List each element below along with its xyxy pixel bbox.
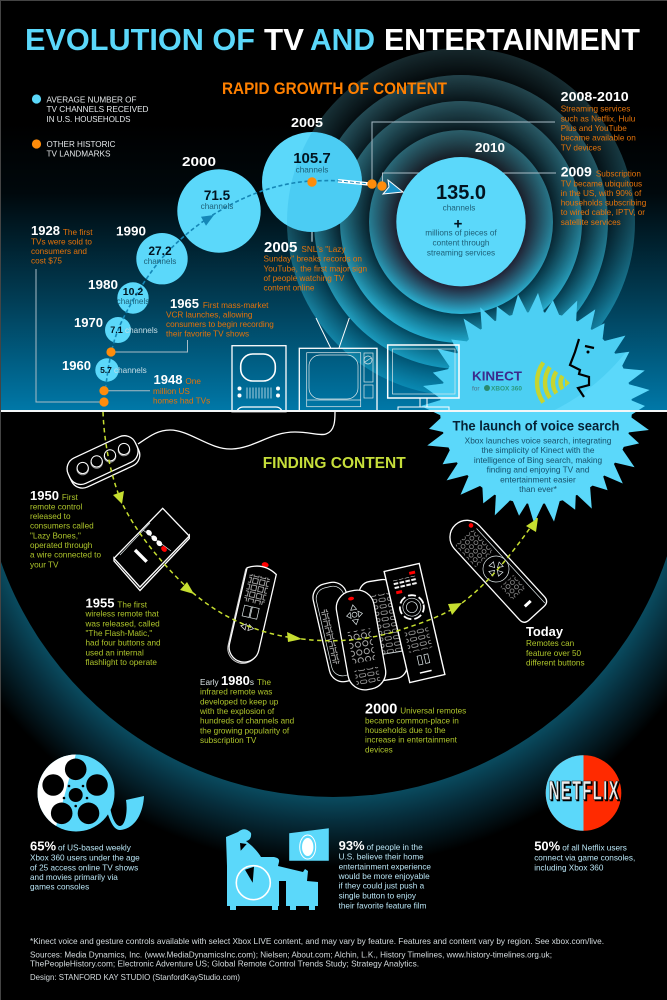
callout: today: Remotes can <box>526 639 575 648</box>
2010 circle labels: content through <box>433 239 490 248</box>
lower tv cables <box>138 412 335 449</box>
callout: 2005 SNL: Sunday" breaks records on <box>264 255 362 264</box>
stat: 93%: single button to enjoy <box>339 892 417 901</box>
callout: 2009: households subscribing <box>561 198 647 208</box>
legend: TV LANDMARKS <box>46 148 111 158</box>
channel labels: channels <box>117 297 149 306</box>
footer notes: *Kinect voice and gesture controls available with select Xbox LIVE content, and may vary by feature. Features and content vary by region. See xbox.com/live. <box>30 936 604 946</box>
callout: 2008-2010: Streaming services <box>561 105 630 114</box>
icon: 1980s remote <box>225 558 278 667</box>
callout: early 1980s: the growing popularity of <box>200 726 290 735</box>
callout: 1950 <box>30 488 101 569</box>
callout: 2009: to wired cable, IPTV, or <box>561 208 645 217</box>
icon: universal remotes <box>310 563 445 693</box>
callout: 1955: was released, called <box>84 619 160 628</box>
channel labels: 2000 <box>182 154 216 169</box>
voice search text: intelligence of Bing search, making <box>474 455 602 465</box>
callout: early 1980s: with the explosion of <box>199 707 275 716</box>
icon: lazy bones remote <box>63 432 144 492</box>
channel labels: 1990 <box>116 224 146 239</box>
callout: today: different buttons <box>526 658 585 667</box>
footer notes: Sources: Media Dynamics, Inc. (www.MediaDynamicsInc.com); Nielsen; About.com; Alchin, L.K., History Timelines, www.history-timelines.org.uk; <box>30 949 552 959</box>
callout: early 1980s: developed to keep up <box>200 697 279 706</box>
stat: 93%: entertainment experience <box>339 862 431 871</box>
heading: rapid growth of content: RAPID GROWTH OF CONTENT <box>222 80 447 98</box>
channel labels: 1980 <box>88 277 118 292</box>
callout: 2000 <box>365 701 466 754</box>
callout: 1950: released to <box>30 512 71 521</box>
callout: 2000: households due to the <box>365 726 446 735</box>
channel labels: 10.2 <box>123 286 143 298</box>
stat: 65%: 65%of US-based weekly <box>30 839 132 854</box>
title: TV <box>264 23 305 57</box>
callout: 2008-2010 <box>561 89 636 152</box>
channel labels: channels <box>144 257 176 266</box>
callout: early 1980s: hundreds of channels and <box>200 717 295 726</box>
icon: flash-matic remote <box>114 508 189 590</box>
callout: 1950: "Lazy Bones," <box>30 531 81 540</box>
callout: 1948: homes had TVs <box>153 396 210 406</box>
growth timeline arrow <box>99 177 403 407</box>
section divider <box>1 410 667 412</box>
channel labels <box>62 115 331 375</box>
stat: 93%: if they could just push a <box>339 882 425 891</box>
callout: 2005 SNL: 2005 SNL's "Lazy <box>264 239 346 256</box>
callout: 2008-2010: such as Netflix, Hulu <box>561 114 636 123</box>
callout: 1928 <box>31 223 93 266</box>
legend: TV CHANNELS RECEIVED <box>46 104 148 114</box>
kinect logo: KINECT <box>472 369 522 384</box>
callout: 2009: 2009 Subscription <box>561 164 641 180</box>
callout: early 1980s: infrared remote was <box>200 688 272 697</box>
2010 circle labels: 135.0 <box>436 182 486 204</box>
icon: netflix pie <box>546 755 621 831</box>
stat: 65%: games consoles <box>30 883 89 892</box>
channel labels: 1960 <box>62 358 91 373</box>
title <box>25 23 640 57</box>
callout: 2005 SNL: of people watching TV <box>264 274 345 283</box>
callout: 1955: 1955 The first <box>86 595 148 610</box>
voice search text: entertainment easier <box>500 474 576 484</box>
callout: 1948: 1948 One <box>154 372 201 387</box>
callout: 1950: remote control <box>30 502 83 511</box>
callout: 2005 SNL: content online <box>264 284 315 293</box>
icon: 1950s tv <box>232 346 286 412</box>
stat: 93%: 93%of people in the <box>339 838 423 853</box>
callout: 1965: 1965 First mass-market <box>170 296 269 311</box>
callout: 2008-2010: Plus and YouTube <box>561 124 627 133</box>
stat: 50% <box>534 839 635 873</box>
legend <box>32 94 148 158</box>
callout: 2008-2010: TV devices <box>561 143 601 152</box>
icon: netflix pie: NETFLIX <box>550 776 620 807</box>
voice search text: than ever* <box>519 484 558 494</box>
callout: 1955: wireless remote that <box>84 610 159 619</box>
heading: finding content: FINDING CONTENT <box>263 455 406 472</box>
icon: sound waves <box>537 362 570 402</box>
callout: today: Today <box>526 624 564 639</box>
callout: 1928: TVs were sold to <box>31 238 92 246</box>
voice search text: finding and enjoying TV and <box>487 465 590 475</box>
callout: 1928: consumers and <box>31 247 87 256</box>
callout: today <box>526 624 585 667</box>
2010 circle labels <box>425 140 505 258</box>
legend: IN U.S. HOUSEHOLDS <box>46 114 131 124</box>
channel circles <box>95 132 526 382</box>
callout: 1955 <box>84 595 161 667</box>
title: ENTERTAINMENT <box>384 23 640 57</box>
voice search text: the simplicity of Kinect with the <box>482 445 595 455</box>
stat: 93% <box>338 838 431 910</box>
footer notes <box>30 936 604 982</box>
callout: 1965: their favorite TV shows <box>166 330 249 339</box>
callout: early 1980s: Early 1980s The <box>200 673 272 688</box>
callout: 2005 SNL: YouTube, the first major sign <box>264 264 368 273</box>
icon: film reel <box>38 754 144 832</box>
callout: 1948: million US <box>153 387 190 396</box>
2010 circle labels: 2010 <box>475 140 505 155</box>
channel labels: 1970 <box>74 315 103 330</box>
callout: 2009: TV became ubiquitous <box>561 179 642 188</box>
channel labels: channels <box>114 366 147 375</box>
callout: 1955: had four buttons and <box>86 639 161 648</box>
callout: 1950: 1950 First <box>30 488 79 503</box>
callout: early 1980s: subscription TV <box>200 736 257 745</box>
callout: 2008-2010: became available on <box>561 134 636 143</box>
callout: 1928: 1928 The first <box>31 223 93 238</box>
kinect logo <box>472 369 522 393</box>
callout: 1955: used an internal <box>86 648 144 657</box>
stat: 65% <box>30 839 140 892</box>
icon: flat screen tv <box>388 345 459 411</box>
callout: 1950: consumers called <box>30 522 94 531</box>
stat: 93%: U.S. believe their home <box>339 852 424 861</box>
callout: 1950: your TV <box>30 560 59 569</box>
title: EVOLUTION OF <box>25 23 255 57</box>
callout: 1950: a wire connected to <box>30 551 101 560</box>
stat: 93%: their favorite feature film <box>339 901 427 910</box>
callout: today: feature over 50 <box>526 649 582 658</box>
stat: 65%: Xbox 360 users under the age <box>30 854 140 863</box>
icon: person in armchair watching tv <box>226 828 329 910</box>
connector lines <box>36 122 556 402</box>
callout: 1955: "The Flash-Matic," <box>86 629 152 638</box>
callout: 1948 <box>153 372 210 406</box>
2010 circle labels: streaming services <box>427 249 495 258</box>
callout: 2009 <box>561 164 647 227</box>
callout: 2008-2010: 2008-2010 <box>561 89 629 104</box>
channel labels: channels <box>296 166 328 175</box>
kinect logo: XBOX 360 <box>491 386 522 393</box>
2010 circle labels: millions of pieces of <box>425 229 497 238</box>
icon: 1970s tv <box>299 318 377 411</box>
voice search text: The launch of voice search <box>452 418 620 434</box>
footer notes: ThePeopleHistory.com; Electronic Adventure US; Global Remote Control Trends Study; Strategy Analytics. <box>30 959 419 969</box>
callout: 1965 <box>166 296 274 339</box>
2010 circle labels: channels <box>443 204 475 213</box>
stat: 50%: including Xbox 360 <box>534 864 604 873</box>
2010 circle labels: + <box>454 216 463 232</box>
channel labels: 2005 <box>291 115 323 130</box>
stat: 65%: of 25 access online TV shows <box>30 864 138 873</box>
stat: 50%: 50%of all Netflix users <box>534 839 627 854</box>
voice search text: Xbox launches voice search, integrating <box>465 435 612 445</box>
callout: 2009: in the US, with 90% of <box>561 189 642 198</box>
kinect logo: for <box>472 386 480 393</box>
legend: OTHER HISTORIC <box>46 139 116 149</box>
footer notes: Design: STANFORD KAY STUDIO (StanfordKayStudio.com) <box>30 972 240 982</box>
channel labels: channels <box>201 202 233 211</box>
callout: 2000: 2000 Universal remotes <box>365 701 466 717</box>
legend: AVERAGE NUMBER OF <box>46 95 136 105</box>
remote timeline arrow <box>103 412 538 642</box>
concentric content rings <box>287 48 635 394</box>
voice search starburst <box>421 293 650 522</box>
callout: 1965: VCR launches, allowing <box>166 310 253 319</box>
channel labels: 71.5 <box>204 188 231 203</box>
stat: 50%: connect via game consoles, <box>534 854 635 863</box>
callout: 1950: operated through <box>30 541 93 550</box>
title: AND <box>310 23 375 57</box>
channel labels: channels <box>125 326 158 335</box>
callout: 2005 SNL <box>264 239 368 293</box>
callout: 1965: consumers to begin recording <box>166 320 274 329</box>
channel labels: 7.1 <box>110 325 123 335</box>
callout: 2000: increase in entertainment <box>365 736 458 745</box>
channel labels: 5.7 <box>100 365 112 375</box>
callout: 2009: satellite services <box>561 218 621 227</box>
stat: 93%: would be more enjoyable <box>338 872 430 881</box>
callout: 2000: became common-place in <box>365 716 459 725</box>
callout: 1955: flashlight to operate <box>86 658 157 667</box>
icon: netflix pie: NETFLIX <box>549 775 619 805</box>
callout: early 1980s <box>199 673 295 745</box>
callout: 1928: cost $75 <box>31 256 62 266</box>
stat: 65%: and movies primarily via <box>30 873 118 882</box>
voice search text <box>452 418 620 494</box>
channel labels: 105.7 <box>293 150 331 167</box>
icon: speaking face <box>570 339 594 397</box>
icon: modern remote <box>443 513 549 625</box>
channel labels: 27.2 <box>148 244 172 258</box>
callout: 2000: devices <box>365 745 393 754</box>
